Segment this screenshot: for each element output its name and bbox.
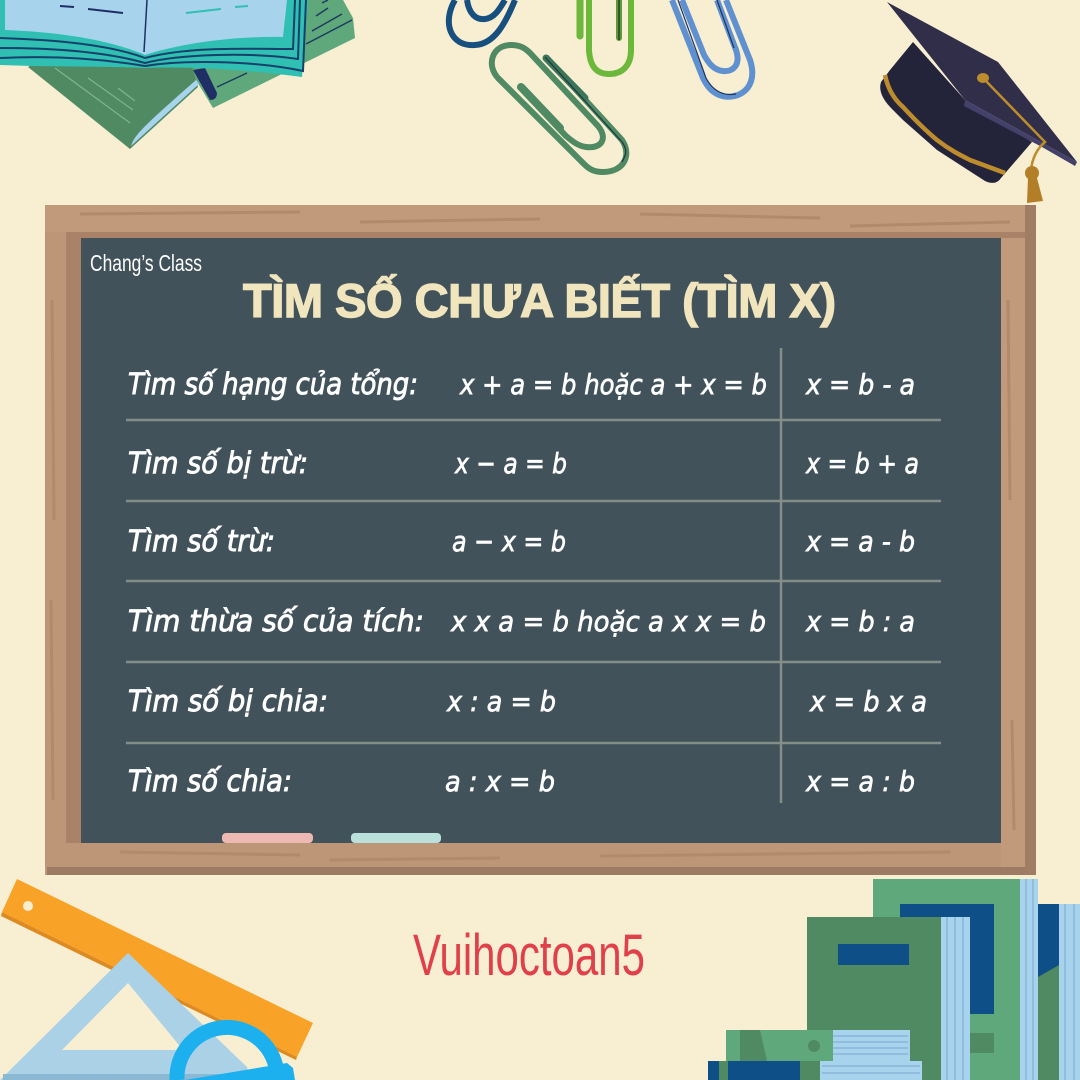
pink chalk	[222, 833, 313, 843]
row: subtrahend: a − x = b	[452, 525, 566, 558]
table grid lines	[126, 348, 941, 803]
icon: ruler, set square and protractor	[0, 879, 313, 1080]
row: factor: x x a = b hoặc a x x = b	[450, 605, 766, 638]
row: minuend: Tìm số bị trừ:	[128, 446, 308, 480]
row: dividend	[128, 684, 927, 718]
icon: green paperclip	[580, 0, 631, 74]
panel: chalkboard	[45, 205, 1036, 875]
row: addend	[128, 367, 915, 401]
blue chalk	[351, 833, 441, 843]
row: addend: Tìm số hạng của tổng:	[128, 367, 418, 401]
board surface	[81, 238, 1001, 843]
row: factor	[128, 604, 915, 638]
row: subtrahend	[128, 524, 915, 558]
icon: stack of books	[708, 879, 1080, 1080]
row: dividend: x : a = b	[446, 685, 556, 718]
row: minuend	[128, 446, 919, 480]
icon: graduation cap	[880, 2, 1077, 203]
row: addend: x + a = b hoặc a + x = b	[459, 368, 767, 401]
row: factor: x = b : a	[805, 605, 915, 638]
row: subtrahend: Tìm số trừ:	[128, 524, 275, 558]
icon: navy paperclip	[449, 0, 515, 45]
row: dividend: x = b x a	[809, 685, 927, 718]
row: dividend: Tìm số bị chia:	[128, 684, 328, 718]
title: TÌM SỐ CHƯA BIẾT (TÌM X)	[243, 274, 836, 327]
icon: blue paperclip	[672, 0, 752, 97]
wooden frame	[45, 205, 1036, 875]
row: divisor: Tìm số chia:	[128, 764, 292, 798]
row: subtrahend: x = a - b	[805, 525, 915, 558]
row: minuend: x = b + a	[805, 447, 919, 480]
icon: dark green paperclip	[492, 45, 626, 172]
icon: stacked open books	[0, 0, 355, 149]
row: minuend: x − a = b	[454, 447, 567, 480]
row: addend: x = b - a	[805, 368, 915, 401]
row: divisor: a : x = b	[445, 765, 555, 798]
row: factor: Tìm thừa số của tích:	[128, 604, 424, 638]
row: divisor	[128, 764, 915, 798]
brand label: Chang’s Class	[90, 250, 202, 276]
footer brand: Vuihoctoan5	[413, 923, 645, 988]
row: divisor: x = a : b	[805, 765, 915, 798]
